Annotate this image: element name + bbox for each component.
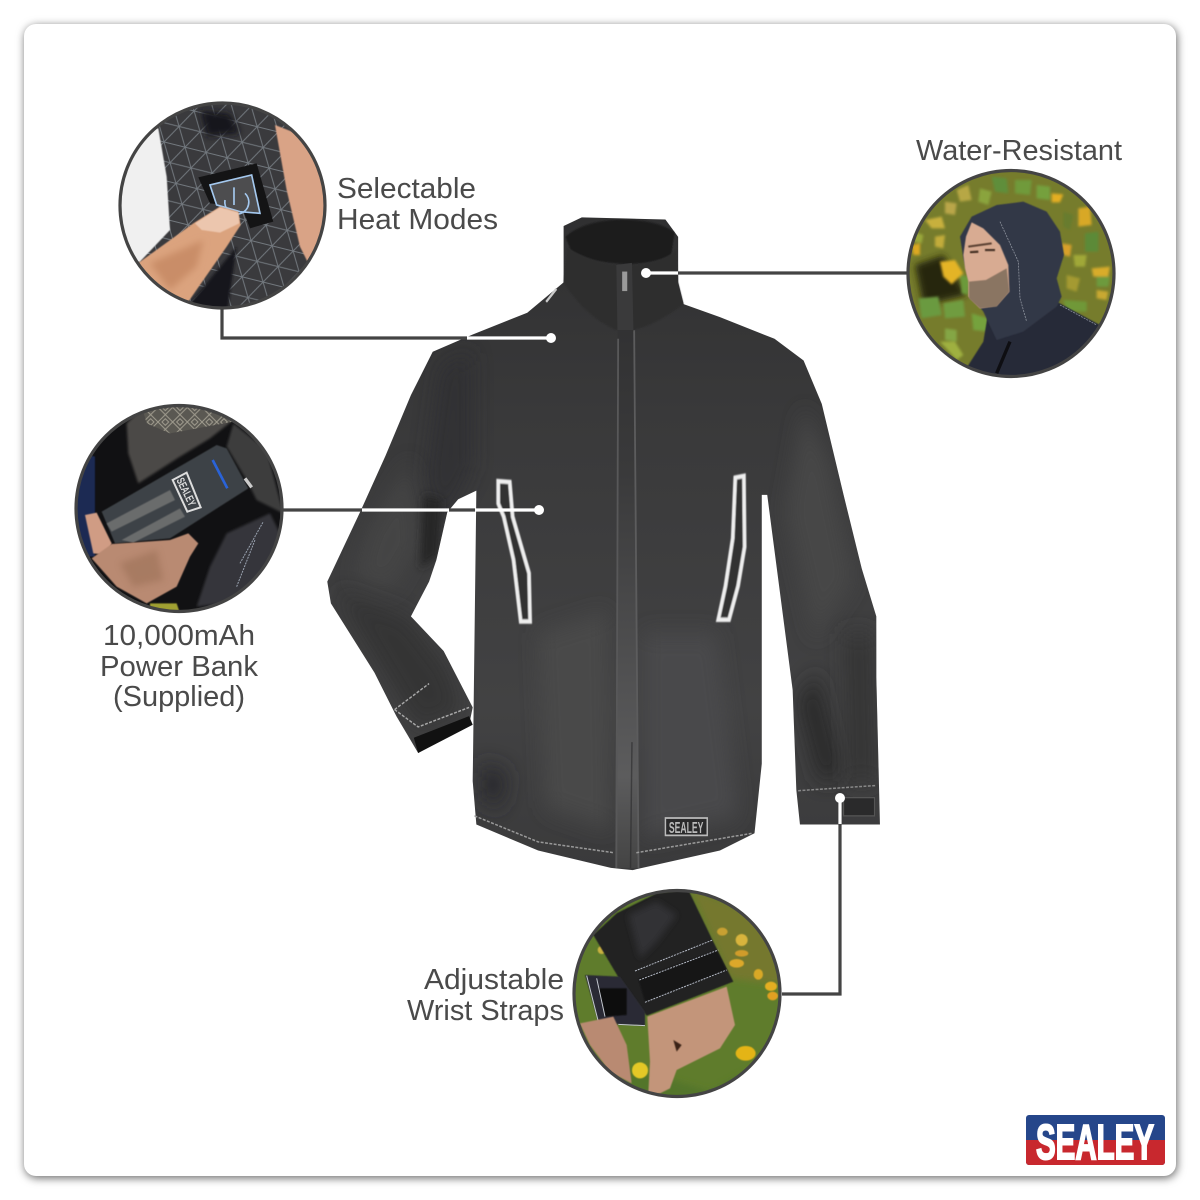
label: power bank: 10,000mAh <box>103 620 255 652</box>
jacket body silhouette <box>327 217 880 870</box>
jacket collar <box>546 220 684 330</box>
icon: power bank photo circle <box>70 400 290 620</box>
left cuff <box>395 684 473 753</box>
label: adjustable wrist straps <box>407 964 564 1027</box>
label: power bank <box>100 620 259 713</box>
connector: wrist straps <box>782 793 845 994</box>
jacket illustration <box>327 217 880 870</box>
label: adjustable wrist straps: Adjustable <box>424 964 564 996</box>
connector: water resistant <box>641 268 907 278</box>
label: selectable heat modes: Selectable <box>337 173 476 205</box>
icon: water resistant photo circle <box>906 168 1116 378</box>
right chest pocket <box>718 476 745 620</box>
hem stitching <box>475 816 753 853</box>
icon: heat modes photo circle <box>118 101 327 310</box>
left chest pocket <box>498 481 530 622</box>
label: selectable heat modes: Heat Modes <box>337 204 498 236</box>
icon: wrist strap photo circle <box>570 885 790 1105</box>
connector: power bank <box>283 505 544 515</box>
main zip <box>615 261 639 868</box>
jacket folds and shading <box>335 352 876 838</box>
label: water-resistant: Water-Resistant <box>916 135 1122 167</box>
right cuff strap <box>798 785 876 816</box>
label: power bank: Power Bank <box>100 651 259 683</box>
label: power bank: (Supplied) <box>113 681 245 713</box>
icon: power bank photo circle: SEALEY <box>173 476 198 509</box>
label: selectable heat modes <box>337 173 498 236</box>
connector: heat modes <box>222 308 556 343</box>
jacket badge <box>665 818 707 837</box>
jacket badge: SEALEY <box>669 820 704 837</box>
label: adjustable wrist straps: Wrist Straps <box>407 995 564 1027</box>
